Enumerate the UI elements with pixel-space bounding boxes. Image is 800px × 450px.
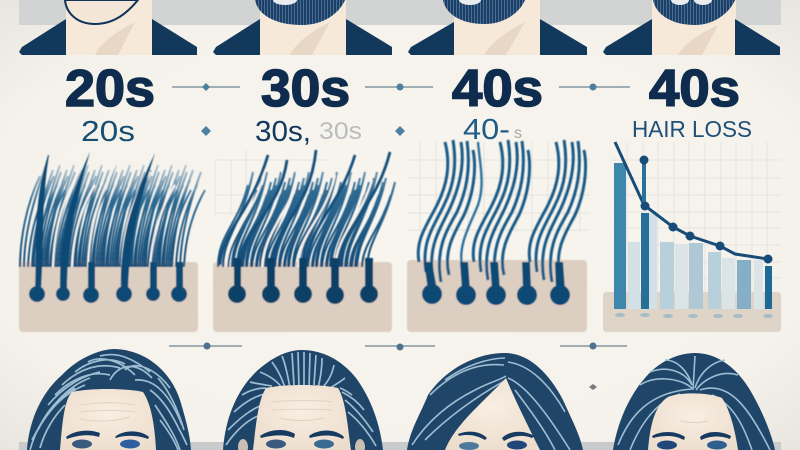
panel: hair loss chart xyxy=(603,142,781,332)
face: man with swept hair xyxy=(27,349,191,450)
face: woman with centre part xyxy=(407,353,583,450)
top row: portrait busts xyxy=(19,0,781,55)
label: faded 30s: 30s xyxy=(319,118,362,145)
timeline connectors upper xyxy=(172,83,630,136)
panel: hair follicles 20s xyxy=(19,152,205,332)
heading: 40s: 40s xyxy=(452,60,543,118)
bulbs xyxy=(228,258,378,304)
face: woman with receding hairline xyxy=(613,353,775,450)
background grids xyxy=(215,142,781,292)
brows and eyes xyxy=(66,431,149,448)
brows and eyes xyxy=(652,432,731,450)
label: 40-: 40- xyxy=(463,114,510,146)
portrait: 40s bearded, hair loss xyxy=(603,0,780,55)
label: hair loss: HAIR LOSS xyxy=(632,116,752,142)
heading: 30s: 30s xyxy=(261,60,350,118)
heading: 20s: 20s xyxy=(65,60,155,118)
heading: 40s second: 40s xyxy=(649,60,740,118)
label: faded s: s xyxy=(514,125,522,142)
panel: hair follicles 30s xyxy=(213,150,395,332)
ears xyxy=(238,439,365,450)
timeline connectors lower xyxy=(169,342,627,390)
age headings xyxy=(65,60,740,118)
label: 30s, 30s: 30s, xyxy=(255,116,311,148)
panel: hair follicles 40s xyxy=(407,140,587,332)
bars xyxy=(614,163,772,309)
bulbs and roots xyxy=(422,262,570,305)
bar base marks xyxy=(615,313,773,318)
brows and eyes xyxy=(260,430,344,448)
decline line xyxy=(615,142,772,264)
sub labels xyxy=(81,114,752,148)
lower band xyxy=(19,442,781,450)
face: man with slicked hair xyxy=(223,350,383,450)
portrait: 30s bearded xyxy=(213,0,392,55)
follicle strands and bulbs xyxy=(29,152,187,303)
portrait: 20s clean shaven xyxy=(19,0,197,55)
portrait: 40s bearded xyxy=(408,0,587,55)
tall dark strands xyxy=(220,150,390,265)
label: 20s: 20s xyxy=(81,116,135,148)
brows and eyes xyxy=(458,432,534,450)
